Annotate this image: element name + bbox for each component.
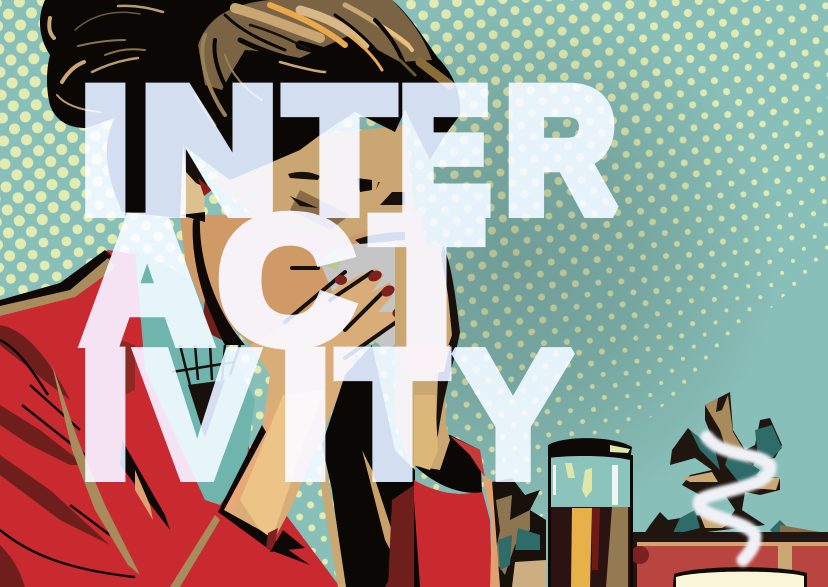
title line: INTER: T <box>286 54 393 248</box>
neck, face <box>180 210 430 345</box>
jacket <box>0 250 340 587</box>
ear <box>165 143 205 218</box>
title line: IVITY: Y <box>452 312 574 516</box>
title line: ACT: C <box>219 183 353 378</box>
title line: IVITY: T <box>339 318 446 512</box>
finger lines <box>285 268 402 358</box>
title line: ACT: T <box>373 184 480 378</box>
hair strands: bun <box>49 6 163 112</box>
coffee beans pile <box>492 478 546 587</box>
title line: INTER <box>81 52 616 248</box>
woman <box>0 0 500 587</box>
title line: INTER: I <box>81 54 130 248</box>
title line: ACT <box>84 183 480 378</box>
title line: IVITY: I <box>281 318 330 512</box>
lower sleeve shadow <box>385 530 414 587</box>
steam <box>699 437 770 560</box>
title line: INTER: R <box>505 52 616 248</box>
title line: INTER: E <box>399 53 490 248</box>
hair <box>40 0 460 218</box>
title: INTERACTIVITY <box>81 52 616 516</box>
coffee cup foreground <box>673 567 807 587</box>
plant silhouette <box>640 392 820 540</box>
title line: IVITY: I <box>81 318 130 512</box>
table and red box <box>630 532 828 587</box>
hands and arms <box>220 268 402 547</box>
title line: INTER: N <box>141 52 277 248</box>
right sleeve <box>414 480 492 587</box>
title line: IVITY: V <box>136 312 258 516</box>
right arm <box>395 240 460 470</box>
title line: ACT: A <box>84 184 210 378</box>
hair strands: main sweep <box>198 0 432 90</box>
center dark <box>322 345 415 587</box>
sweater <box>135 250 255 505</box>
jacket shadows <box>0 325 70 400</box>
title line: IVITY <box>81 312 574 516</box>
cup <box>320 241 405 350</box>
glass jar <box>548 438 633 587</box>
